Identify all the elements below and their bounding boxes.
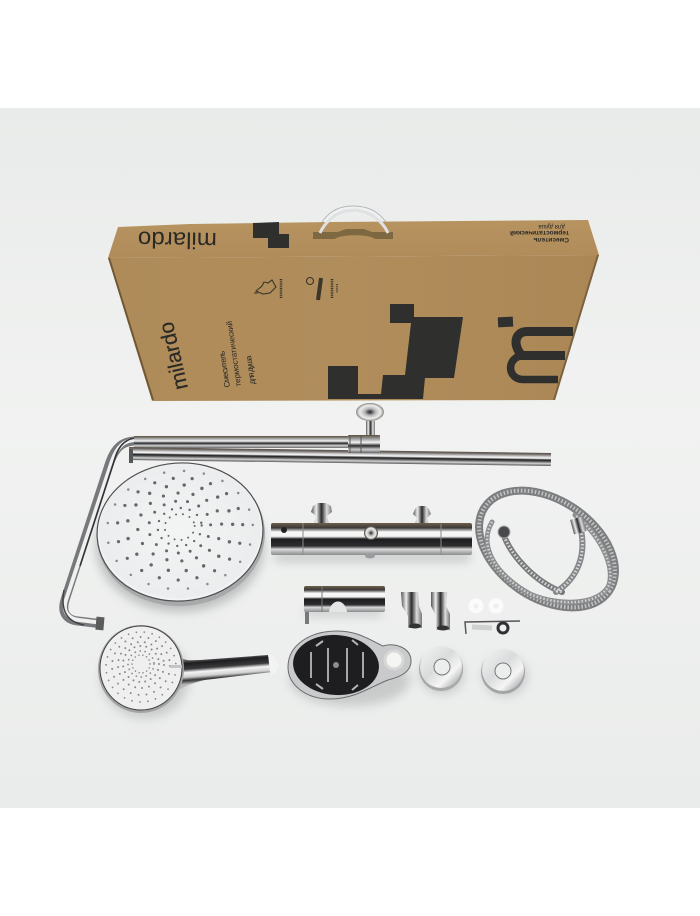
handle grip	[320, 210, 388, 233]
spray nozzles	[103, 466, 257, 594]
centre knob	[364, 526, 378, 540]
hose left tail	[503, 533, 562, 592]
hose second coil texture	[487, 515, 610, 602]
hose right tail	[556, 530, 582, 592]
front product title: термостатический	[225, 320, 243, 387]
front product title: для душа	[244, 354, 257, 385]
arm end nut	[95, 617, 105, 630]
box right edge	[553, 255, 599, 400]
head plate	[95, 459, 265, 603]
front logo: milardo	[155, 320, 193, 392]
thermostat mixer	[271, 503, 472, 558]
soap dish	[288, 631, 411, 699]
offset connector left	[401, 592, 422, 628]
bottom stud	[365, 554, 375, 558]
flap graphic block	[253, 222, 289, 248]
hand shower switch	[170, 665, 182, 668]
white plastic rings	[471, 601, 501, 611]
large shower head	[92, 457, 270, 612]
handle tip	[268, 654, 279, 674]
dish ribs	[311, 648, 363, 682]
hand shower	[98, 625, 279, 713]
large rotated m mark	[511, 332, 573, 380]
bracket seam	[321, 586, 323, 612]
box left edge	[108, 258, 154, 400]
right inlet valve	[413, 506, 431, 526]
dish black tray	[291, 632, 381, 698]
box top flap	[108, 220, 599, 258]
front product title: Смеситель	[217, 350, 232, 388]
flap product title: термостатический	[510, 229, 569, 237]
bracket body	[304, 586, 385, 612]
small square	[498, 317, 513, 327]
dish chrome outline	[288, 631, 411, 699]
arm curved base	[64, 441, 136, 624]
shadows under metal parts	[96, 480, 527, 718]
shower hose	[457, 466, 637, 632]
hand shower rim	[98, 625, 184, 713]
hose tail texture	[503, 530, 582, 592]
arm lower dark reflection	[63, 590, 84, 625]
hose second coil	[487, 515, 610, 602]
carry handle	[316, 208, 391, 240]
sliding rail	[129, 447, 551, 466]
handle slot	[313, 229, 393, 239]
connector flange	[356, 403, 384, 421]
screw	[472, 624, 492, 631]
connector clamp	[348, 435, 380, 453]
dish holder ring	[385, 651, 403, 669]
cardboard box	[108, 208, 599, 401]
arm highlight	[65, 440, 136, 623]
flap logo: milardo	[138, 227, 217, 254]
dish drain	[333, 662, 339, 668]
side screw	[281, 527, 287, 533]
flap product title: Смеситель	[533, 236, 569, 243]
wall flange left	[419, 646, 463, 691]
mixer body	[271, 523, 472, 555]
hand shower plate	[100, 626, 182, 710]
rail end cap	[129, 449, 133, 463]
flap product title: для душа	[538, 223, 565, 229]
allen key and washer	[465, 621, 520, 634]
wall flange right	[481, 649, 525, 694]
connector stem	[366, 421, 375, 436]
washer	[498, 623, 508, 633]
hose outer coil	[457, 466, 637, 632]
hose right nut	[570, 516, 587, 534]
wall connector	[348, 403, 384, 453]
overhead shower arm	[63, 436, 350, 630]
bracket pin	[305, 610, 309, 624]
slider bracket	[304, 586, 385, 624]
flap product title	[510, 223, 569, 243]
hose outer coil texture	[457, 466, 637, 632]
large graphic block	[328, 304, 463, 399]
head rim	[92, 458, 270, 612]
offset connector right	[431, 592, 450, 630]
arm straight section	[134, 436, 350, 448]
clamp seams	[350, 436, 361, 453]
body seams	[303, 523, 441, 555]
head chrome line	[92, 457, 268, 607]
grey photo backdrop	[0, 108, 700, 808]
handle	[176, 655, 272, 690]
dish oblique slots	[316, 640, 358, 690]
carry handle highlight	[316, 208, 391, 240]
left inlet valve	[311, 503, 332, 524]
hose left nut	[498, 526, 510, 538]
bracket clip	[329, 602, 347, 612]
front product title	[217, 320, 257, 388]
handling icon: mixer warning	[306, 278, 337, 300]
arm dark reflection	[80, 438, 138, 566]
box front face	[108, 255, 599, 401]
handling icon: hand	[254, 279, 281, 298]
hand shower nozzles	[106, 632, 176, 702]
rail body	[129, 447, 551, 466]
